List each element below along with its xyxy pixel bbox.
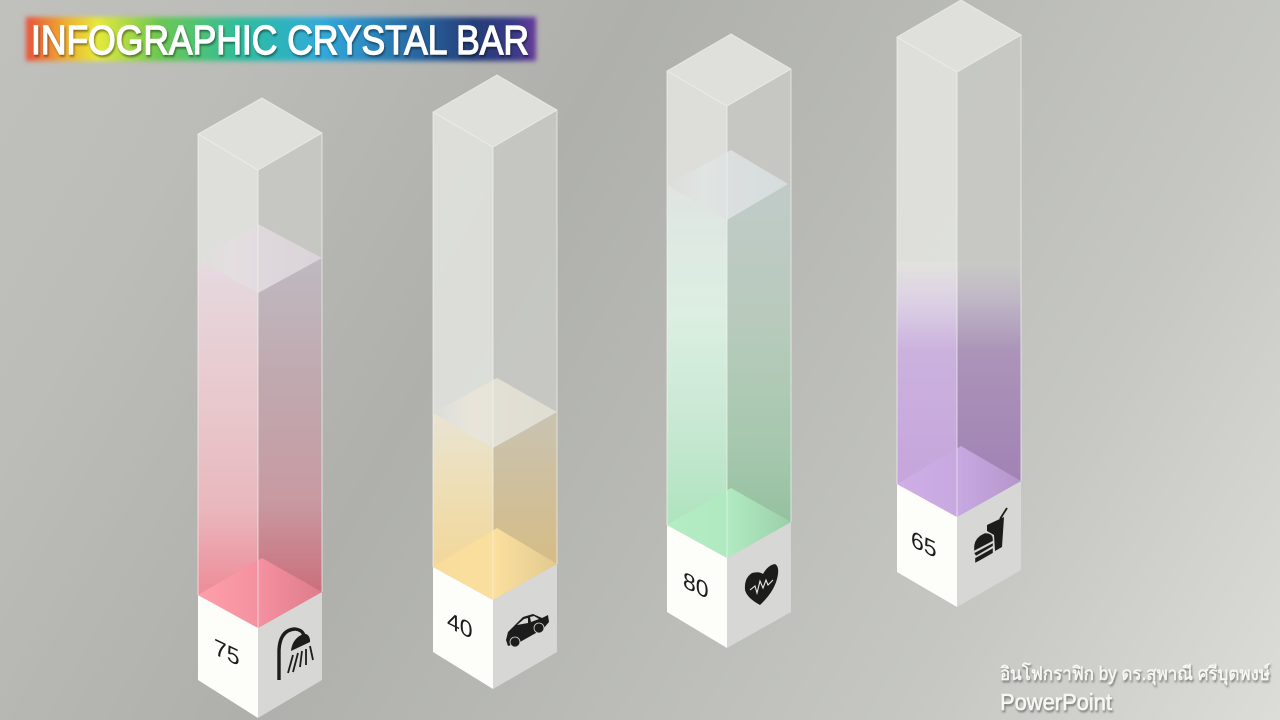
value 75: 75 (214, 634, 240, 672)
bar 1: shower 75 (198, 98, 322, 718)
value 65: 65 (911, 526, 937, 564)
title: INFOGRAPHIC CRYSTAL BAR (31, 17, 529, 63)
icon: heart (745, 564, 778, 605)
value 80: 80 (683, 567, 709, 605)
icon: fast food (974, 508, 1007, 563)
icon: shower (279, 629, 313, 680)
bar 2: car 40 (433, 75, 557, 689)
title banner (26, 17, 536, 63)
bar 4: food 65 (897, 0, 1021, 607)
bar 3: heart 80 (667, 34, 791, 648)
credit line PowerPoint: PowerPoint (1000, 689, 1113, 715)
icon: car (506, 614, 549, 647)
footer credit (1000, 662, 1270, 715)
value 40: 40 (447, 607, 473, 645)
